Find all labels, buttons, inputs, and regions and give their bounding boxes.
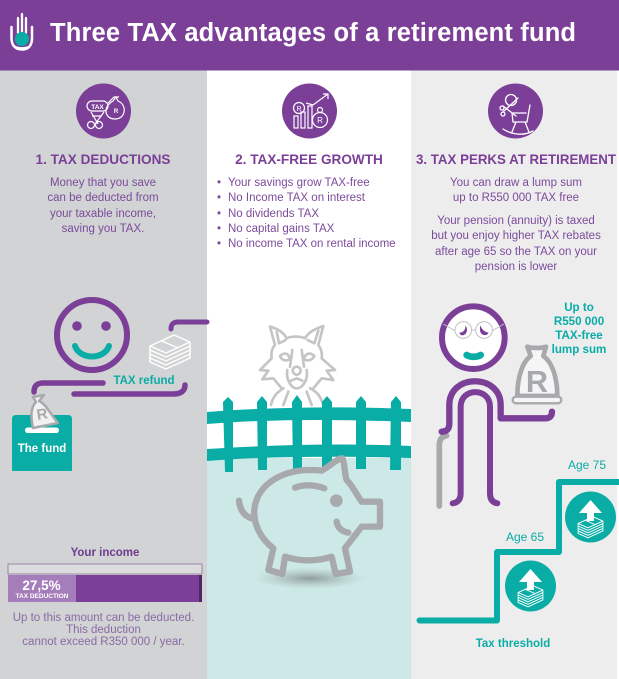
text list: growth benefits xyxy=(217,177,396,250)
icon: money bag into fund: R xyxy=(35,405,49,424)
icon: tax scissors and money bag: TAX xyxy=(91,104,104,111)
icon: tax scissors and money bag xyxy=(76,84,131,138)
panel background: right xyxy=(411,70,617,679)
illustration: fence xyxy=(207,395,411,472)
heading: 2. TAX-FREE GROWTH: 2. TAX-FREE GROWTH xyxy=(235,152,383,167)
chart: tax threshold steps xyxy=(420,482,619,620)
header bar xyxy=(0,0,619,70)
text list: growth benefits: • xyxy=(217,223,221,235)
bar chart: income and deduction xyxy=(8,564,202,602)
heading: your income: Your income xyxy=(71,547,139,559)
head xyxy=(442,306,505,369)
label: tax threshold: Tax threshold xyxy=(476,638,550,650)
bar chart: income and deduction: TAX DEDUCTION xyxy=(16,593,69,600)
label: Age 65: Age 65 xyxy=(506,530,544,544)
panel background: middle xyxy=(207,70,411,460)
text list: growth benefits: Your savings grow TAX-free xyxy=(228,177,370,189)
text: pension: but you enjoy higher TAX rebates xyxy=(431,230,601,242)
box: the fund xyxy=(12,415,72,471)
arrow: refund line in xyxy=(171,322,207,329)
text list: growth benefits: • xyxy=(217,192,221,204)
heading: 1. TAX DEDUCTIONS: 1. TAX DEDUCTIONS xyxy=(36,152,170,167)
icon: smiley face xyxy=(57,300,127,370)
body xyxy=(442,381,552,432)
panel background: left xyxy=(0,70,207,679)
bar chart: income and deduction: 27,5% xyxy=(22,578,61,593)
money bag: R xyxy=(526,365,548,399)
panel: tax perks at retirement xyxy=(411,70,619,679)
text: pension: pension is lower xyxy=(475,261,557,273)
icon: growth chart: R xyxy=(317,116,323,125)
illustration: retired man xyxy=(439,306,561,506)
icon: growth chart xyxy=(282,84,337,138)
legs xyxy=(453,392,497,503)
panel: tax deductions xyxy=(0,70,207,679)
text list: growth benefits: • xyxy=(217,208,221,220)
text: deductions explanation: Money that you save xyxy=(50,177,156,189)
icon: threshold up age 65 xyxy=(505,560,556,612)
box: the fund: The fund xyxy=(18,443,66,455)
callout: lump sum: TAX-free xyxy=(555,329,603,342)
callout: lump sum: Up to xyxy=(564,301,594,314)
callout: lump sum: lump sum xyxy=(552,343,606,356)
icon: tax scissors and money bag: R xyxy=(114,109,119,115)
heading: 3. TAX PERKS AT RETIREMENT: 3. TAX PERKS AT RETIREMENT xyxy=(416,152,617,167)
cane xyxy=(439,436,447,506)
icon: cash stack xyxy=(150,335,190,369)
panel: tax-free growth xyxy=(171,70,411,679)
text list: growth benefits: • xyxy=(217,238,221,250)
text: deductions explanation: saving you TAX. xyxy=(62,223,144,235)
text: deduction limit: This deduction xyxy=(66,624,141,636)
text: lump sum: You can draw a lump sum xyxy=(450,177,582,189)
text: pension: Your pension (annuity) is taxed xyxy=(437,215,595,227)
icon: threshold up age 75 xyxy=(565,492,616,542)
text list: growth benefits: No income TAX on rental income xyxy=(228,238,396,250)
panel ground: pale teal xyxy=(207,458,411,679)
text list: growth benefits: • xyxy=(217,177,221,189)
arrow: lower refund line xyxy=(74,385,185,394)
text: deduction limit: cannot exceed R350 000 / year. xyxy=(22,636,185,648)
text list: growth benefits: No Income TAX on interest xyxy=(228,192,366,204)
label: TAX refund: TAX refund xyxy=(113,375,175,387)
icon: growth chart: R xyxy=(296,106,302,113)
icon: rocking chair xyxy=(488,84,543,138)
callout: lump sum: R550 000 xyxy=(554,315,604,328)
title: Three TAX advantages of a retirement fund xyxy=(50,19,576,47)
arrow: refund line out xyxy=(34,383,103,392)
icon: wolf xyxy=(260,326,335,405)
text: pension: after age 65 so the TAX on your xyxy=(435,246,597,258)
text list: growth benefits: No dividends TAX xyxy=(228,208,319,220)
text: deductions explanation: can be deducted from xyxy=(47,192,159,204)
money bag xyxy=(513,347,561,403)
icon: money bag into fund xyxy=(31,395,58,428)
text: lump sum: up to R550 000 TAX free xyxy=(453,192,579,204)
text: deduction limit: Up to this amount can be deducted. xyxy=(13,612,194,624)
illustration: piggy bank xyxy=(239,458,380,589)
label: Age 75: Age 75 xyxy=(568,458,606,472)
icon: hand logo xyxy=(11,14,33,50)
text: deductions explanation: your taxable income, xyxy=(50,208,156,220)
text list: growth benefits: No capital gains TAX xyxy=(228,223,335,235)
